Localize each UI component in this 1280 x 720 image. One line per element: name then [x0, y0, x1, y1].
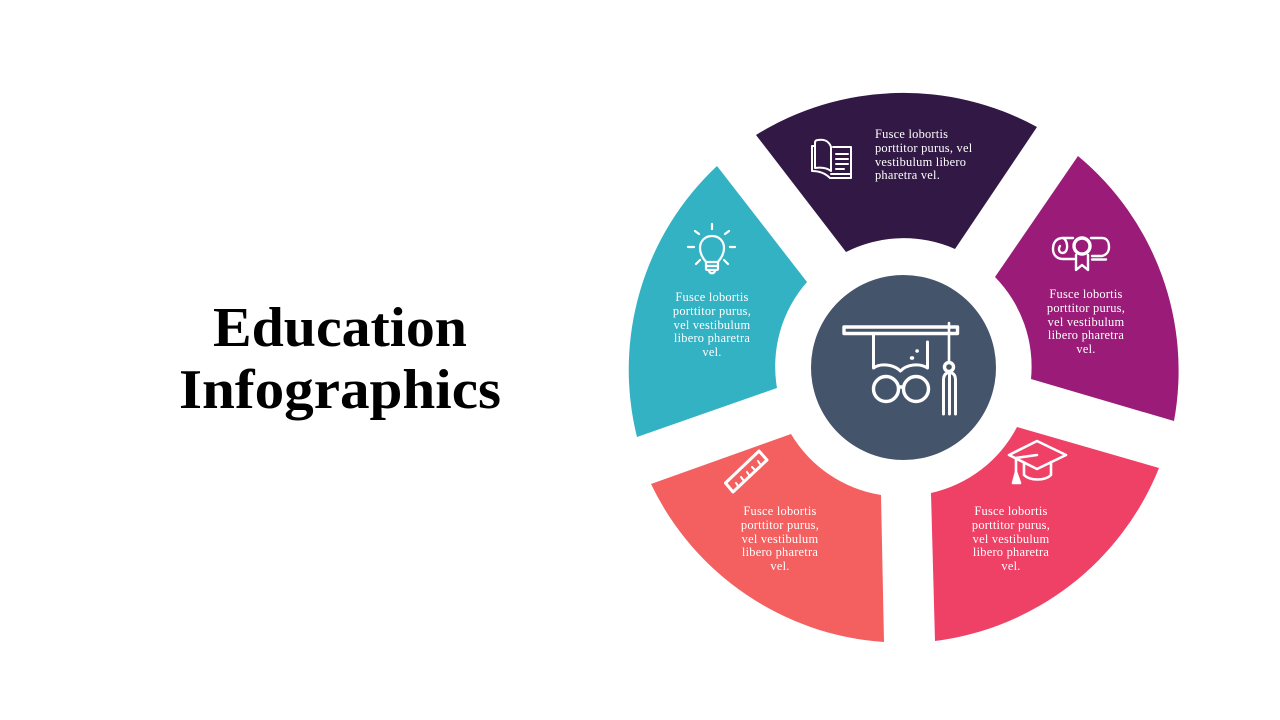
- text: graduation cap: porttitor purus,: [972, 518, 1050, 532]
- panel: light bulb segment: [629, 166, 807, 437]
- segment shape: coral: [651, 434, 884, 642]
- panel: diploma segment: [995, 156, 1179, 421]
- icon: mortarboard with glasses: [844, 323, 958, 414]
- title: Education: [213, 297, 467, 359]
- text: light bulb: libero pharetra: [674, 331, 750, 345]
- text: diploma: vel vestibulum: [1048, 315, 1124, 329]
- title: [179, 297, 501, 421]
- segment shape: teal: [629, 166, 807, 437]
- text: ruler: libero pharetra: [742, 545, 818, 559]
- text: diploma: libero pharetra: [1048, 328, 1124, 342]
- text: light bulb: vel.: [702, 345, 722, 359]
- text: graduation cap: vel vestibulum: [973, 532, 1049, 546]
- icon: light bulb: [688, 224, 735, 273]
- text: book: vestibulum libero: [875, 155, 966, 169]
- title: Infographics: [179, 359, 501, 421]
- text: light bulb: vel vestibulum: [674, 318, 750, 332]
- text: book: pharetra vel.: [875, 168, 940, 182]
- panel: ruler segment: [651, 434, 884, 642]
- icon: graduation cap: [1009, 441, 1066, 483]
- text: ruler: Fusce lobortis: [743, 504, 817, 518]
- text: diploma: Fusce lobortis: [1049, 287, 1123, 301]
- text: light bulb: Fusce lobortis: [675, 290, 749, 304]
- icon: ruler: [726, 451, 767, 492]
- text: graduation cap: Fusce lobortis: [974, 504, 1048, 518]
- center circle: [811, 275, 996, 460]
- text: book: porttitor purus, vel: [875, 141, 973, 155]
- text: ruler: vel.: [770, 559, 790, 573]
- text: diploma: vel.: [1076, 342, 1096, 356]
- text: diploma: porttitor purus,: [1047, 301, 1125, 315]
- icon: diploma: [1053, 238, 1109, 270]
- segment shape: magenta: [995, 156, 1179, 421]
- text: light bulb: porttitor purus,: [673, 304, 751, 318]
- text: ruler: porttitor purus,: [741, 518, 819, 532]
- text: graduation cap: libero pharetra: [973, 545, 1049, 559]
- segment shape: dark purple: [756, 93, 1037, 252]
- icon: open book: [812, 140, 851, 178]
- text: ruler: vel vestibulum: [742, 532, 818, 546]
- segment shape: pink: [931, 427, 1159, 641]
- panel: book segment: [756, 93, 1037, 252]
- text: graduation cap: vel.: [1001, 559, 1021, 573]
- panel: graduation cap segment: [931, 427, 1159, 641]
- text: book: Fusce lobortis: [875, 127, 948, 141]
